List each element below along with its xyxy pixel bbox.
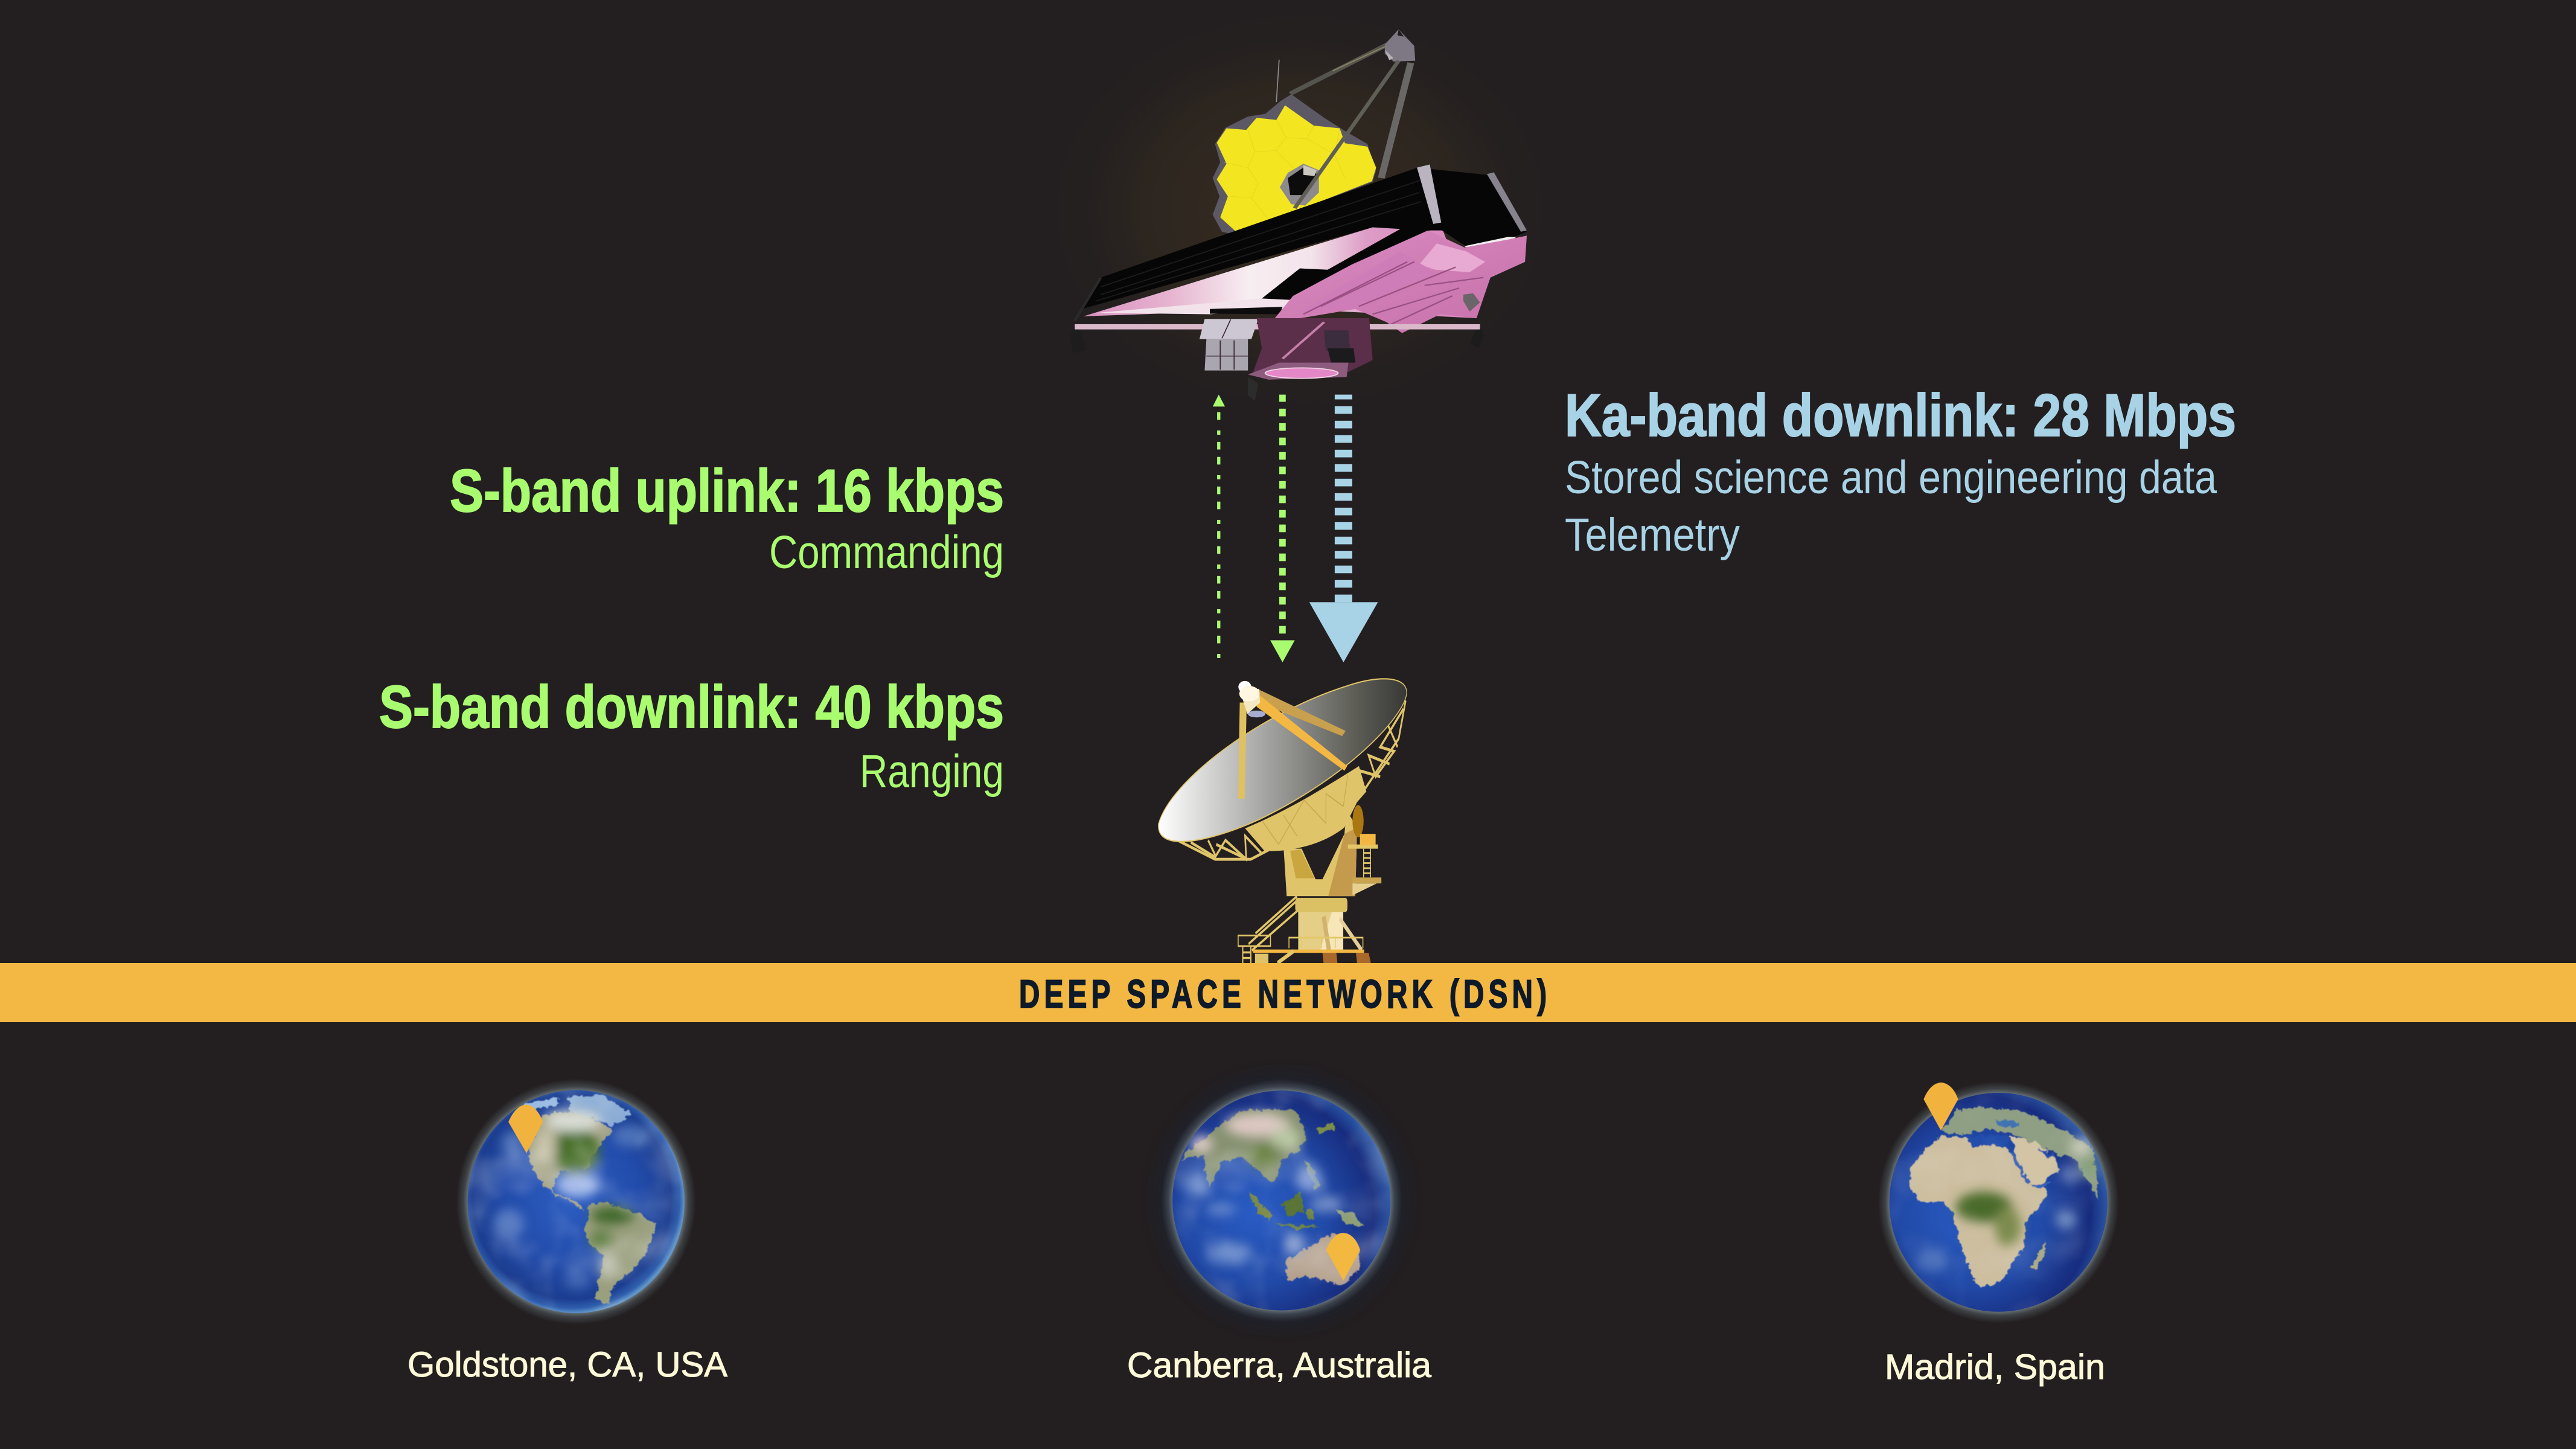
primary mirror: gold segments: [1217, 61, 1399, 233]
label: S-band downlink: S-band downlink: 40 kbps: [379, 673, 1004, 740]
label: S-band downlink: Ranging: [860, 746, 1004, 798]
pin: Madrid: [1923, 1083, 1958, 1130]
banner title: DEEP SPACE NETWORK (DSN): [1019, 972, 1547, 1017]
pin: Canberra: [1326, 1233, 1360, 1281]
banner: Deep Space Network: [0, 963, 2576, 1022]
label: S-band uplink: Commanding: [769, 526, 1004, 578]
earth: Canberra: [1160, 1078, 1403, 1323]
antenna mast: [1276, 60, 1279, 102]
dish rim band: [1245, 766, 1366, 851]
pink folded sunshield membrane: [1265, 231, 1527, 333]
continent: Asia: [1179, 1109, 1306, 1188]
arrow: Ka-band downlink: [1309, 395, 1378, 662]
pin: Goldstone: [508, 1105, 543, 1153]
sunshield edge booms: [1070, 164, 1527, 353]
islands: Southeast Asia: [1248, 1192, 1273, 1221]
sunshield black layers: [1082, 168, 1527, 309]
feed struts: [1238, 681, 1347, 799]
continent: Arabia: [2010, 1136, 2059, 1188]
continent: Europe and Asia: [1943, 1107, 2098, 1200]
label: Ka-band downlink: Telemetry: [1565, 509, 1740, 561]
label: S-band uplink: S-band uplink: 16 kbps: [450, 457, 1004, 524]
earth: Madrid: [1878, 1081, 2119, 1323]
label: S-band downlink: [379, 673, 1004, 798]
continent: South America: [584, 1203, 656, 1303]
label: Canberra: Canberra, Australia: [1127, 1346, 1432, 1385]
label: Ka-band downlink: Ka-band downlink: 28 Mbps: [1565, 382, 2236, 449]
dish pedestal and platforms: [1238, 805, 1381, 964]
secondary mirror support: [1290, 30, 1415, 178]
label: Goldstone: Goldstone, CA, USA: [407, 1345, 727, 1384]
label: Ka-band downlink: [1565, 382, 2236, 561]
continent: Africa: [1910, 1136, 2048, 1288]
ground antenna: radio dish: [1159, 679, 1407, 964]
spacecraft bus: [1200, 318, 1373, 401]
arrow: S-band downlink: [1270, 395, 1295, 662]
continent: Australia: [1286, 1233, 1359, 1285]
arrow: S-band uplink: [1213, 395, 1225, 658]
earth: Goldstone: [456, 1079, 696, 1325]
label: S-band uplink: [450, 457, 1004, 578]
mirror backing: [1213, 94, 1376, 234]
dish surface: [1159, 679, 1407, 842]
label: Ka-band downlink: Stored science and engineering data: [1565, 452, 2217, 504]
sunshield underside: [1084, 227, 1477, 318]
label: Madrid: Madrid, Spain: [1885, 1348, 2105, 1387]
spacecraft: James Webb Space Telescope: [1037, 0, 1563, 419]
dish truss: [1177, 700, 1405, 859]
lower boom: [1075, 324, 1480, 330]
arrows: communication links: [1213, 395, 1378, 662]
continent: North America: [528, 1111, 613, 1211]
